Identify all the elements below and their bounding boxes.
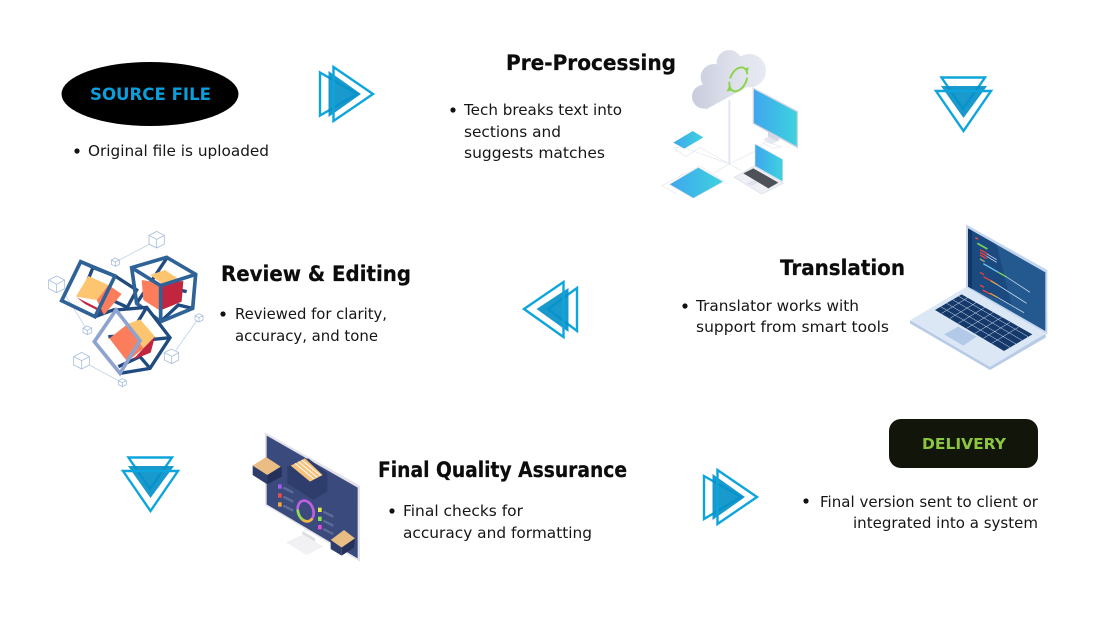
- panel: review and editing: [49, 231, 411, 387]
- source file pill: [62, 62, 238, 126]
- review bullet text: accuracy, and tone: [235, 327, 378, 345]
- delivery bullet text: [803, 493, 1039, 532]
- final quality bullet text: accuracy and formatting: [403, 524, 592, 542]
- panel: pre-processing: [450, 50, 797, 198]
- arrow: source file to pre-processing: [320, 67, 373, 121]
- monitor: [753, 88, 797, 147]
- translation bullet text: Translator works with: [695, 297, 859, 315]
- pre-processing bullet text: [450, 101, 622, 162]
- arrow: pre-processing to translation: [936, 78, 991, 131]
- translation bullet text: support from smart tools: [696, 318, 889, 336]
- laptop: [734, 144, 783, 194]
- review bullet text: [220, 305, 387, 345]
- pre-processing bullet text: suggests matches: [464, 144, 605, 162]
- delivery badge: [889, 419, 1038, 468]
- delivery bullet text: integrated into a system: [853, 514, 1038, 532]
- translation bullet text: [682, 297, 889, 336]
- icon: wireframe cubes: [49, 231, 203, 387]
- arrow: translation to review: [524, 282, 577, 337]
- icon: cloud connected to devices: [662, 50, 797, 198]
- delivery bullet text: Final version sent to client or: [820, 493, 1039, 511]
- icon: laptop with code: [910, 224, 1047, 370]
- final quality heading: Final Quality Assurance: [378, 458, 627, 482]
- review bullet text: Reviewed for clarity,: [235, 305, 387, 323]
- tablet: [669, 167, 723, 198]
- pre-processing heading: Pre-Processing: [506, 51, 676, 75]
- cube left: [62, 262, 137, 317]
- pre-processing bullet text: Tech breaks text into: [463, 101, 622, 119]
- arrow: review to final quality: [123, 458, 178, 511]
- panel: final quality assurance: [253, 432, 627, 562]
- final quality bullet text: Final checks for: [403, 502, 524, 520]
- cloud: [692, 50, 766, 109]
- source file pill: SOURCE FILE: [90, 85, 211, 105]
- panel: delivery: [803, 419, 1039, 532]
- translation heading: Translation: [780, 256, 905, 280]
- panel: translation: [682, 224, 1047, 370]
- icon: dashboard monitor: [253, 432, 360, 562]
- final quality bullet text: [389, 502, 592, 542]
- small wire shapes: [49, 231, 203, 387]
- arrow: final quality to delivery: [704, 470, 757, 524]
- review heading: Review & Editing: [221, 262, 411, 286]
- delivery badge: DELIVERY: [922, 435, 1007, 453]
- pre-processing bullet text: sections and: [464, 123, 561, 141]
- source file bullet text: Original file is uploaded: [88, 142, 269, 160]
- phone: [673, 131, 703, 149]
- cube bottom: [94, 307, 170, 373]
- cube right: [132, 257, 196, 322]
- panel: source file: [62, 62, 269, 160]
